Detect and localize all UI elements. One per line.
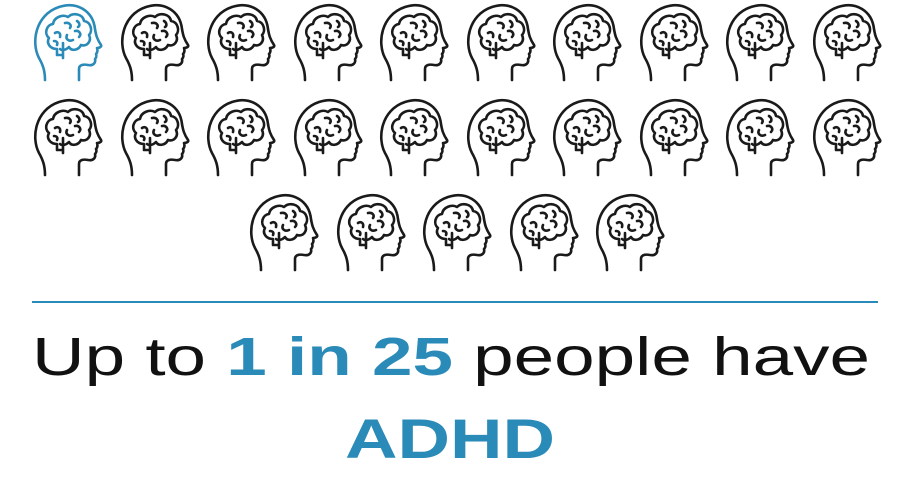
headline: Up to 1 in 25 people have [32,327,870,387]
headline: ADHD: ADHD [345,407,555,470]
icon: highlighted head [35,5,101,80]
icon grid: 25 heads [35,5,880,270]
